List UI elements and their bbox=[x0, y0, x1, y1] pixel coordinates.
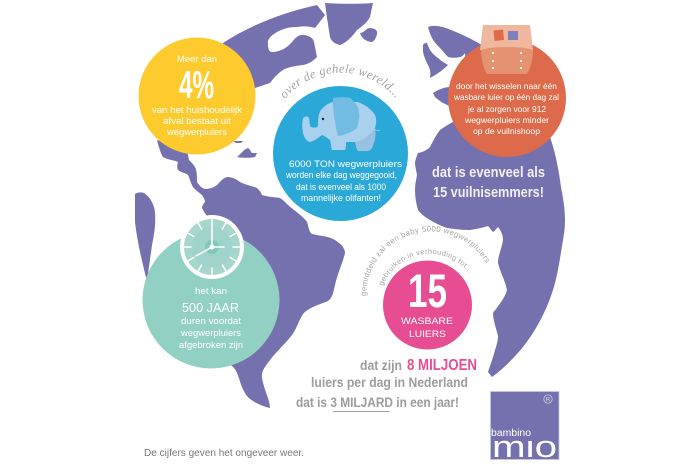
icon: elephant bbox=[302, 97, 380, 151]
panel: 4 percent household waste bbox=[138, 38, 256, 154]
logo: bambino mio: R bbox=[546, 396, 551, 404]
pink circle bbox=[383, 260, 472, 350]
text: household waste caption: van het huishoudelijk bbox=[152, 105, 243, 115]
footnote: De cijfers geven het ongeveer weer. bbox=[144, 448, 304, 459]
curved heading: over de gehele wereld: over de gehele wereld... bbox=[282, 64, 396, 98]
text block: 8 miljoen per dag: luiers per dag in Nederland bbox=[311, 374, 468, 390]
text: 500 jaar caption bbox=[179, 286, 243, 350]
island: Cuba bbox=[233, 141, 257, 158]
blue circle bbox=[273, 86, 408, 221]
landmass: Greenland bbox=[325, 3, 373, 45]
logo: bambino mio: bambino bbox=[491, 428, 531, 439]
panel: 500 years bbox=[142, 215, 280, 368]
text block: 8 miljoen per dag bbox=[296, 357, 477, 412]
icon: diaper bbox=[480, 25, 533, 74]
text block: 8 miljoen per dag: 8 MILJOEN bbox=[407, 357, 477, 374]
text: 6000 ton caption bbox=[285, 159, 403, 203]
text: household waste caption: afval bestaat uit bbox=[163, 116, 232, 126]
teal circle bbox=[142, 232, 280, 368]
text: 500 jaar caption: duren voordat bbox=[181, 316, 242, 326]
text block: 8 miljoen per dag: dat zijn bbox=[360, 357, 402, 373]
landmass: Scandinavia bbox=[423, 43, 448, 78]
text: household waste caption: wegwerpluiers bbox=[166, 127, 228, 137]
continent: Europe, Africa and Asia bbox=[415, 85, 565, 377]
continent: Europe north bbox=[428, 26, 490, 66]
world map bbox=[135, 3, 565, 408]
text: 912 caption: wasbare luier op één dag zal bbox=[453, 92, 559, 102]
text: 500 jaar caption: het kan bbox=[195, 286, 227, 296]
text: 500 jaar caption: wegwerpluiers bbox=[180, 328, 242, 338]
continent: Central and South America bbox=[157, 140, 345, 408]
text block: 8 miljoen per dag: dat is 3 MILJARD in een jaar! bbox=[296, 394, 459, 410]
text: 6000 ton caption: 6000 TON wegwerpluiers bbox=[289, 159, 403, 169]
text: 912 caption: door het wisselen naar één bbox=[456, 81, 557, 91]
text: wasbare luiers: LUIERS bbox=[409, 329, 446, 340]
text: 500 jaar caption: afgebroken zijn bbox=[179, 340, 243, 350]
curved text: 5000 wegwerpluiers: gemiddeld zal een baby 5000 wegwerpluiers bbox=[362, 226, 489, 296]
text: 912 caption: je al zorgen voor 912 bbox=[467, 104, 546, 114]
statistic: 15: 15 bbox=[408, 264, 447, 317]
callout: 15 vuilnisemmers: 15 vuilnisemmers! bbox=[433, 185, 544, 201]
panel: 15 washable nappies bbox=[383, 260, 472, 350]
text: 912 caption: wegwerpluiers minder bbox=[464, 115, 549, 125]
panel: 6000 ton bbox=[273, 86, 408, 221]
island: Iceland bbox=[360, 28, 377, 42]
text: wasbare luiers bbox=[401, 316, 453, 340]
text: 6000 ton caption: worden elke dag weggegooid, bbox=[285, 170, 397, 180]
orange circle bbox=[448, 39, 566, 157]
icon: clock bbox=[180, 215, 244, 279]
logo: bambino mio bbox=[490, 392, 559, 464]
callout: 15 vuilnisemmers bbox=[432, 165, 545, 201]
text: 912 caption bbox=[453, 81, 559, 136]
continent: North America bbox=[200, 5, 325, 120]
landmass: west coast strip bbox=[135, 192, 155, 281]
curved text: 5000 wegwerpluiers: gebruiken in verhouding tot... bbox=[380, 248, 470, 286]
text: 500 jaar caption: 500 JAAR bbox=[182, 300, 239, 315]
yellow circle bbox=[138, 38, 256, 154]
text: wasbare luiers: WASBARE bbox=[401, 316, 453, 327]
logo: bambino mio: mio bbox=[492, 429, 557, 464]
callout: 15 vuilnisemmers: dat is evenveel als bbox=[432, 165, 545, 181]
statistic: 4%: 4% bbox=[179, 64, 214, 107]
text: household waste caption bbox=[152, 105, 243, 137]
text: 912 caption: op de vuilnishoop bbox=[473, 126, 540, 136]
panel: washable nappy saves 912 bbox=[448, 25, 566, 157]
text: 6000 ton caption: mannelijke olifanten! bbox=[301, 193, 381, 203]
text: Meer dan: Meer dan bbox=[177, 54, 217, 64]
text: 6000 ton caption: dat is evenveel als 1000 bbox=[296, 182, 386, 192]
